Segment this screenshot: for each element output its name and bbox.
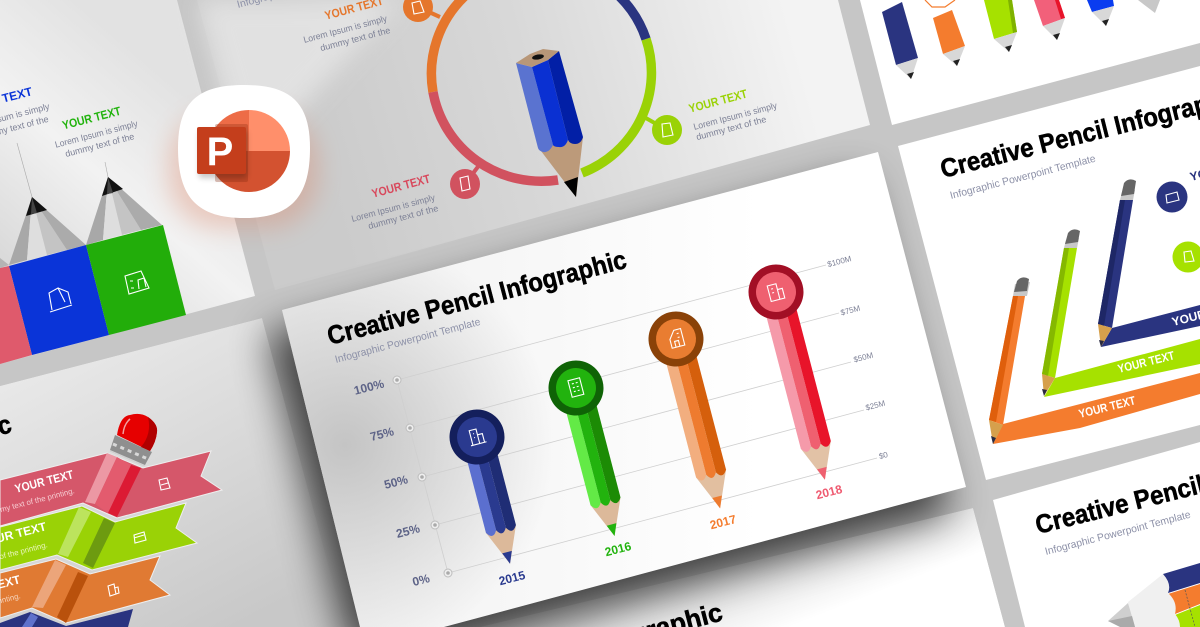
year labels: 2017 xyxy=(708,512,738,532)
year labels: 2016 xyxy=(603,539,633,559)
pencil: 2016 xyxy=(542,354,641,543)
pencil: green xyxy=(86,162,186,335)
pencil: navy xyxy=(882,2,918,79)
icon circle: green xyxy=(1172,242,1200,272)
ring xyxy=(431,0,651,181)
text: pink caption: Lorem Ipsum is simply xyxy=(350,192,437,224)
text: pink caption: dummy text of the xyxy=(367,203,439,231)
panel: ring pencil slide xyxy=(197,0,870,290)
text: green caption: dummy text of the xyxy=(695,114,767,142)
icon: building xyxy=(49,288,72,312)
text: blue caption xyxy=(0,101,54,145)
icon circle: navy xyxy=(1156,182,1188,212)
panel: three long pencils slide xyxy=(898,66,1200,480)
pencil: 2017 xyxy=(642,305,747,515)
pencil: pink xyxy=(1034,0,1065,40)
icon: powerpoint app xyxy=(168,85,318,228)
panel: top-right pencils slide xyxy=(860,0,1200,125)
pencil: navy long xyxy=(1098,179,1136,347)
heading: green your text: YOUR TEXT xyxy=(61,104,123,132)
axis labels: percent: 0% xyxy=(411,571,431,589)
pencil: green long xyxy=(1042,229,1080,396)
icon: building xyxy=(125,271,149,294)
subtitle: Infographic Powerpoint Template xyxy=(334,316,482,366)
chart grid xyxy=(397,265,877,573)
subtitle: Infographic Powerpoint Template xyxy=(1044,509,1192,558)
shadow: main slide xyxy=(267,177,951,627)
pencil: green xyxy=(984,0,1017,52)
pencil: pink xyxy=(0,266,32,364)
text: green caption: Lorem Ipsum is simply xyxy=(54,118,139,150)
pencil: centre blue xyxy=(516,49,583,197)
axis labels: dollars: $25M xyxy=(865,399,887,412)
bubble: pink xyxy=(450,164,480,199)
axis labels: dollars: $50M xyxy=(853,351,875,364)
axis labels: dollars: $75M xyxy=(840,304,862,317)
label: YOUR TEXT xyxy=(1116,348,1176,376)
axis labels: percent: 75% xyxy=(369,424,396,444)
icon xyxy=(134,532,146,543)
heading: green your text: YOUR TEXT xyxy=(687,86,749,116)
panel: pencil blocks slide xyxy=(0,0,255,364)
pencil: blue xyxy=(1087,0,1114,26)
pencil: blue xyxy=(9,143,109,355)
eraser: red cap xyxy=(110,414,157,466)
ribbon: green xyxy=(0,503,197,570)
label: YOUR TEXT xyxy=(13,467,75,496)
pencil: 2015 xyxy=(443,403,537,571)
ribbon: navy xyxy=(1101,305,1200,347)
subtitle: Infographic Powerpoint Template xyxy=(949,153,1097,202)
letter P: P xyxy=(207,130,233,174)
panel: ribbons slide xyxy=(0,318,305,627)
bubble: orange xyxy=(403,0,440,22)
axis labels: dollars: $0 xyxy=(878,450,889,461)
bubble: green xyxy=(644,115,682,145)
axis labels: percent: 25% xyxy=(395,521,422,541)
year labels: 2015 xyxy=(497,568,527,588)
axis dots xyxy=(393,376,452,577)
ribbon: navy xyxy=(0,609,133,627)
ribbon: orange xyxy=(993,373,1200,444)
pencil: orange xyxy=(925,0,965,66)
text: orange caption: dummy text of the xyxy=(319,25,391,53)
pencil: orange long xyxy=(989,277,1030,444)
icon xyxy=(108,584,119,596)
icon xyxy=(159,478,170,490)
year labels xyxy=(497,482,844,588)
pencil: 2018 xyxy=(742,258,852,487)
pencil: grey xyxy=(1138,0,1160,13)
text: green caption: dummy text of the xyxy=(64,131,135,159)
title: Creative Pencil Infographic xyxy=(324,244,630,351)
ribbon: pink xyxy=(0,451,222,526)
axis labels: percent xyxy=(352,376,431,589)
pencil: striped tip xyxy=(1108,563,1200,627)
axis labels: dollars: $100M xyxy=(826,254,853,269)
panel: lower title slide xyxy=(480,508,1005,627)
axis labels: percent: 50% xyxy=(383,472,410,492)
year labels: 2018 xyxy=(814,482,844,502)
axis labels: percent: 100% xyxy=(352,376,386,398)
text: green caption: Lorem Ipsum is simply xyxy=(692,100,779,132)
axis labels: dollars xyxy=(826,254,889,461)
text: orange caption: Lorem Ipsum is simply xyxy=(302,13,389,45)
panel: bottom-right slide xyxy=(993,436,1200,627)
heading: pink your text: YOUR TEXT xyxy=(370,171,432,201)
ribbon: green xyxy=(1044,339,1200,397)
panel: main bar chart slide xyxy=(282,152,966,627)
label: YOUR TEXT xyxy=(1077,393,1137,421)
ribbon: orange xyxy=(0,556,170,623)
